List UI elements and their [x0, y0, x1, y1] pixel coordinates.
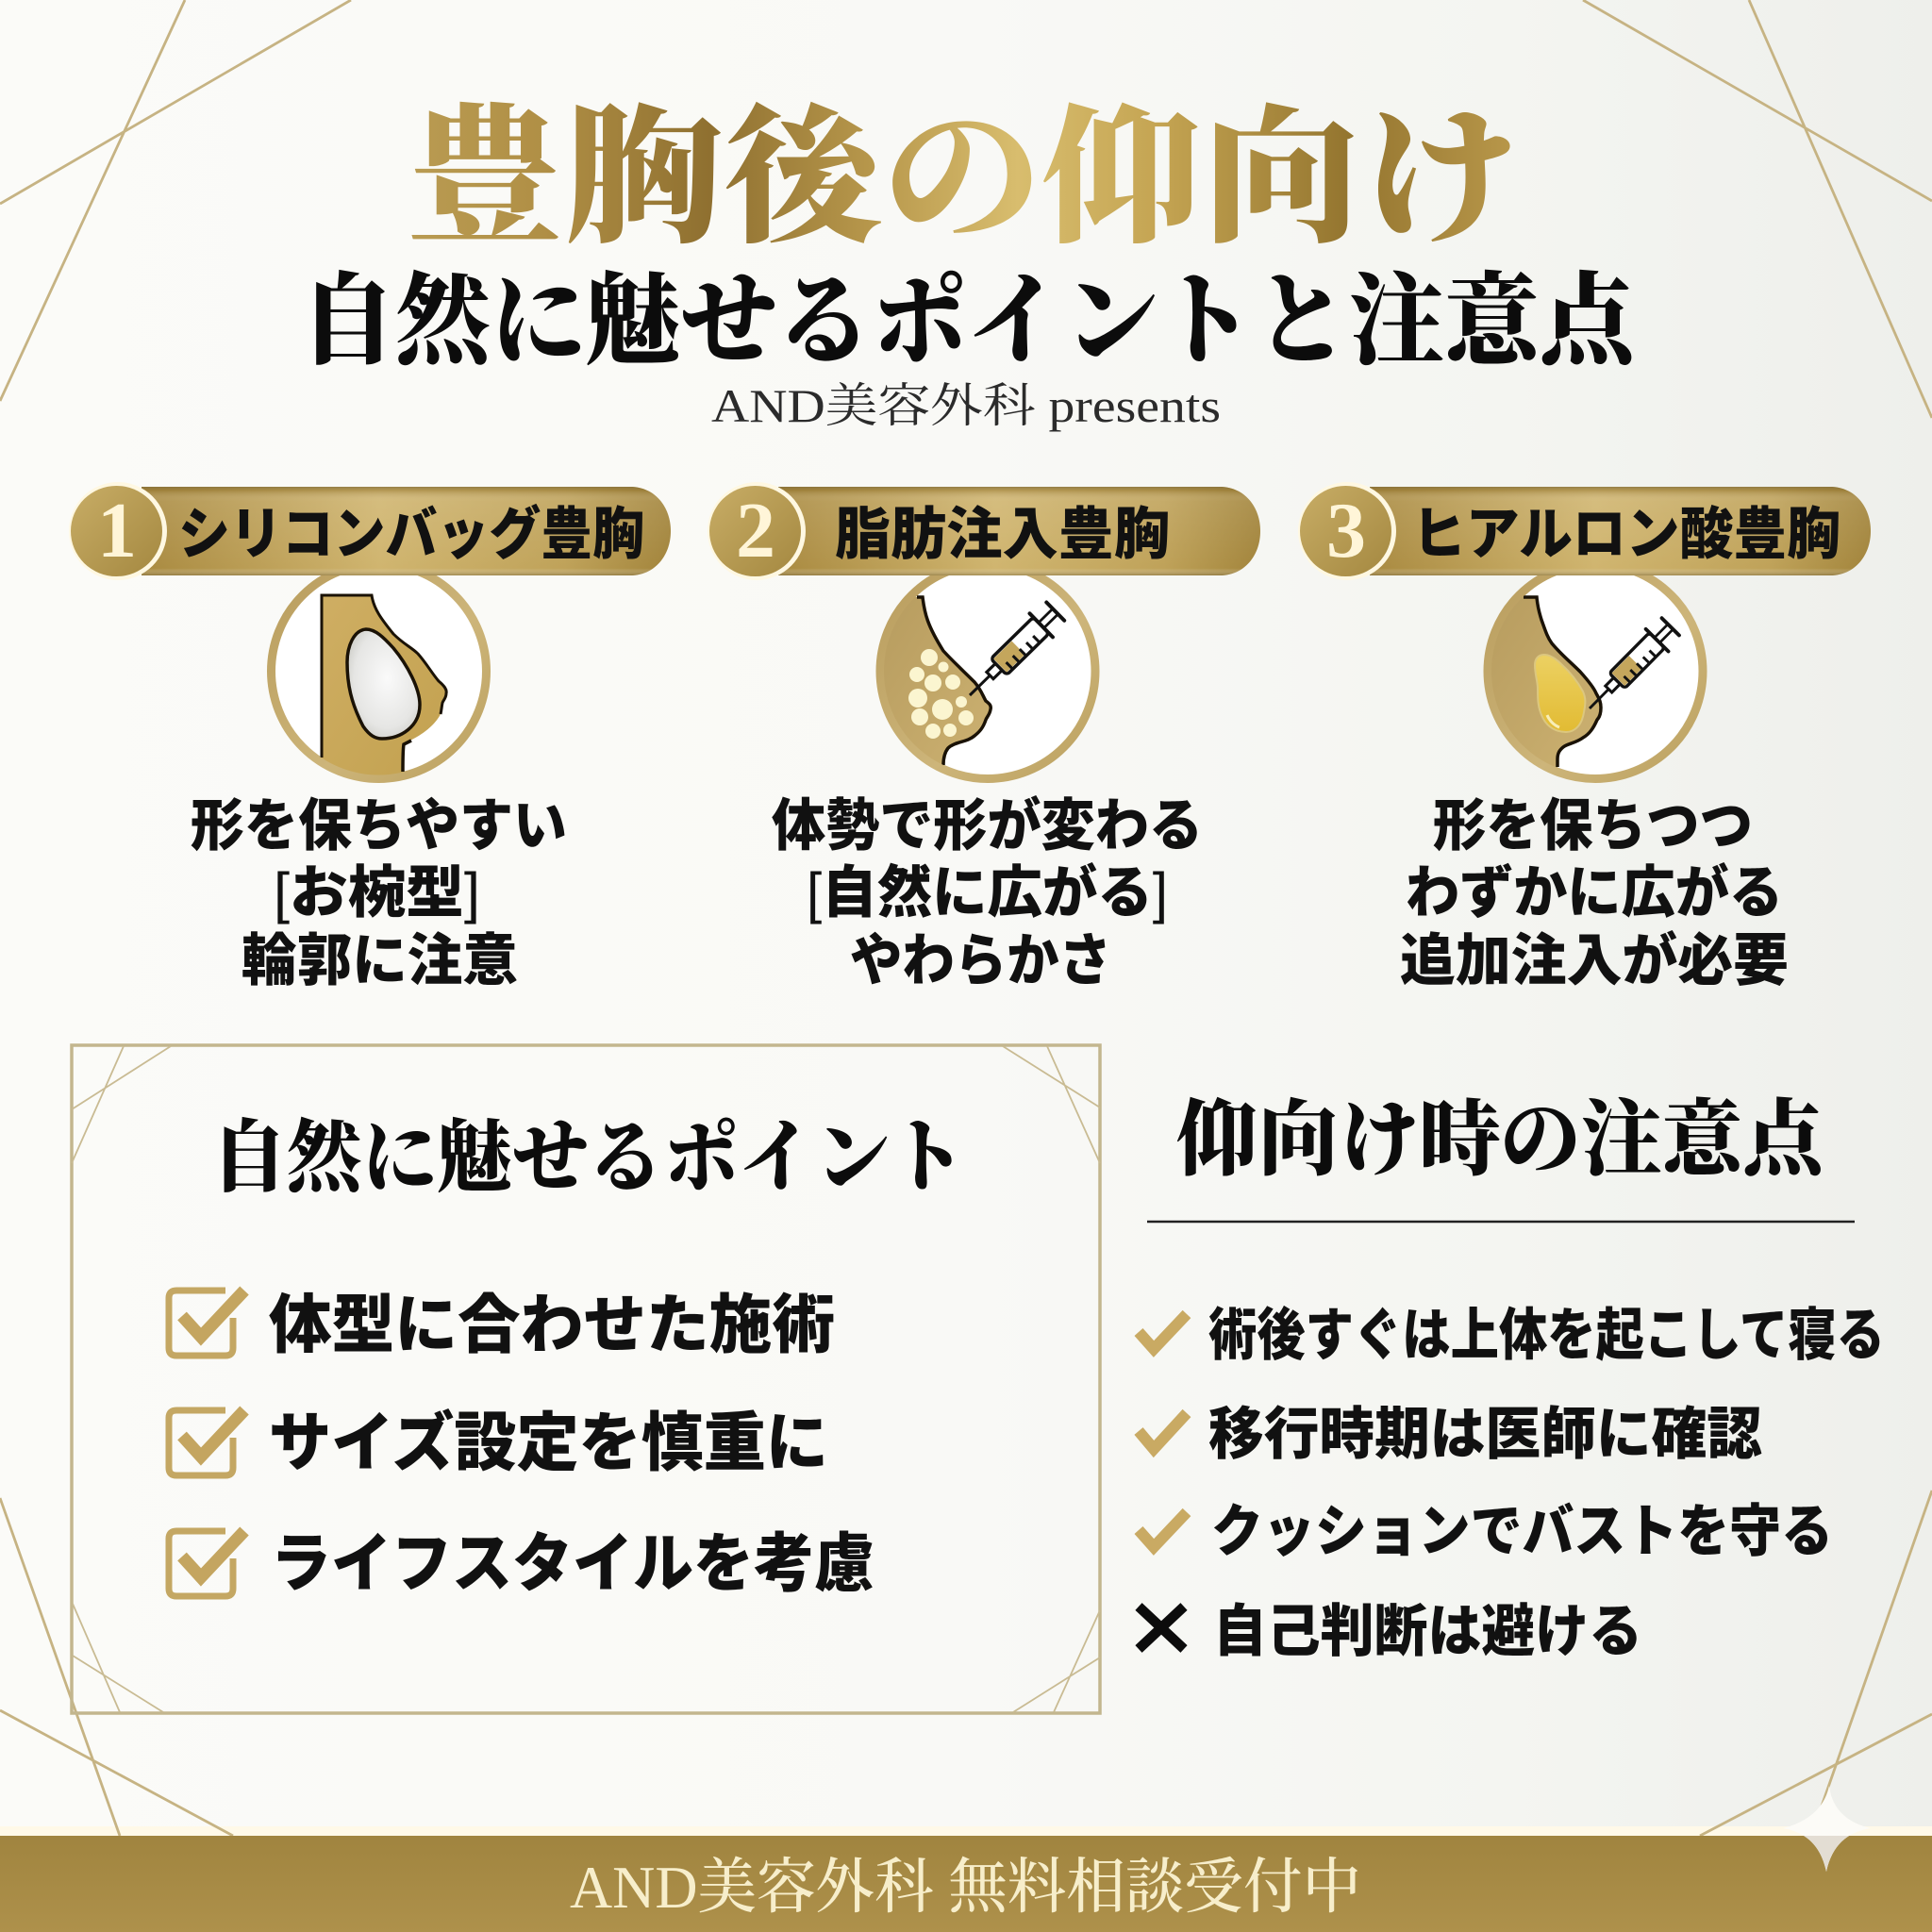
- ribbon 1: シリコンバッグ豊胸: [178, 503, 644, 566]
- icon: fat injection: [873, 564, 1095, 783]
- caution item 4: 自己判断は避ける: [1213, 1600, 1642, 1663]
- description 3: [1400, 794, 1789, 992]
- description 2: [自然に広がる]: [807, 861, 1168, 924]
- column 1: silicone bag: [69, 482, 671, 992]
- presenter line: AND美容外科 presents: [711, 379, 1221, 432]
- description 2: やわらかさ: [850, 929, 1111, 992]
- ribbon 2: 2: [736, 487, 775, 575]
- footer band: [0, 1836, 1932, 1932]
- description 3: 形を保ちつつ: [1433, 794, 1753, 858]
- column 2: fat injection: [708, 482, 1260, 992]
- description 2: [772, 794, 1203, 992]
- ribbon 1: [69, 482, 671, 580]
- description 1: [191, 794, 567, 992]
- icon: hyaluronic acid injection: [1476, 564, 1703, 783]
- ribbon 1: 1: [97, 487, 137, 575]
- check item 1: 体型に合わせた施術: [269, 1290, 835, 1361]
- panel: natural points: [72, 1045, 1100, 1713]
- footer text: AND美容外科 無料相談受付中: [570, 1854, 1361, 1921]
- icon: sparkle: [1783, 1786, 1871, 1872]
- title: 豊胸後の仰向け: [406, 97, 1519, 262]
- ribbon 3: [1298, 482, 1871, 580]
- cautions heading: 仰向け時の注意点: [1176, 1095, 1830, 1187]
- subtitle: 自然に魅せるポイントと注意点: [300, 267, 1643, 377]
- description 1: [お椀型]: [274, 861, 480, 924]
- icon: silicone implant cross-section: [272, 564, 487, 783]
- ribbon 2: 脂肪注入豊胸: [835, 503, 1170, 566]
- panel: cautions when lying on back: [1139, 1095, 1885, 1663]
- ribbon 3: 3: [1326, 487, 1366, 575]
- check item 3: ライフスタイルを考慮: [271, 1528, 874, 1600]
- description 2: 体勢で形が変わる: [772, 794, 1203, 858]
- check item 2: サイズ設定を慎重に: [269, 1407, 828, 1479]
- description 1: 形を保ちやすい: [191, 794, 567, 858]
- caution item 2: 移行時期は医師に確認: [1208, 1403, 1762, 1466]
- ribbon 2: [708, 482, 1260, 580]
- description 1: 輪郭に注意: [242, 929, 518, 992]
- panel heading: 自然に魅せるポイント: [211, 1115, 965, 1203]
- caution item 3: クッションでバストを守る: [1211, 1500, 1833, 1563]
- ribbon 3: ヒアルロン酸豊胸: [1412, 503, 1840, 566]
- description 3: わずかに広がる: [1406, 861, 1783, 924]
- column 3: hyaluronic acid: [1298, 482, 1871, 992]
- description 3: 追加注入が必要: [1400, 929, 1789, 992]
